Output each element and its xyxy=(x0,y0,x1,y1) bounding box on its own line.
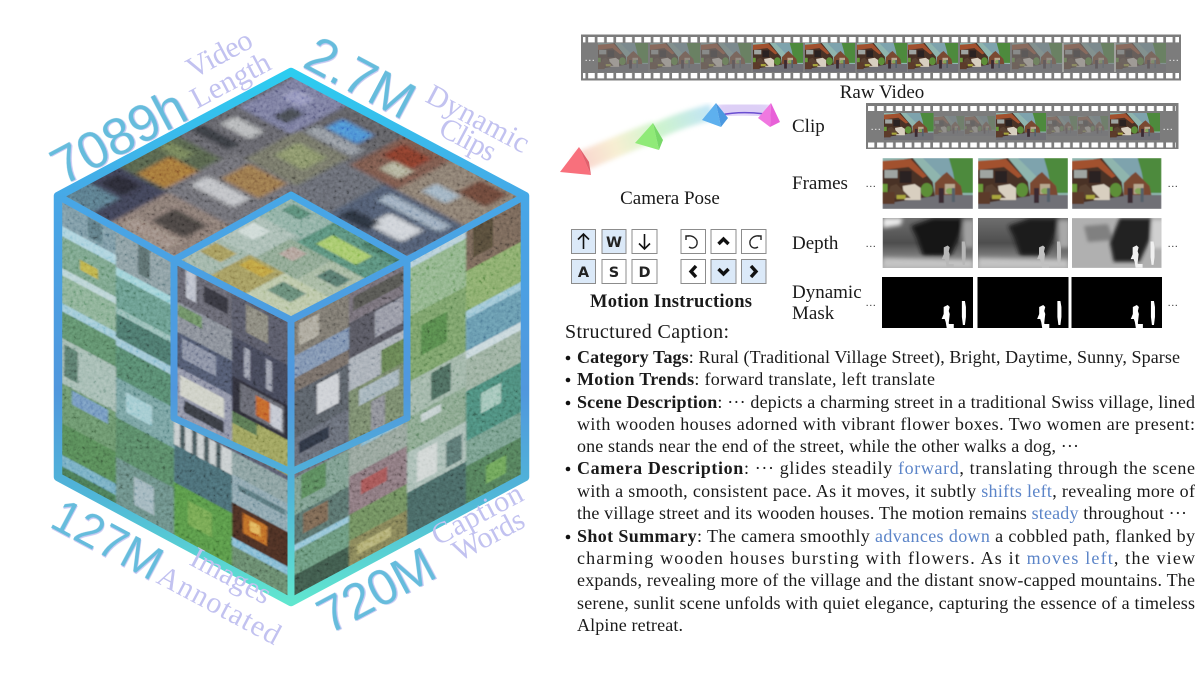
camera: green xyxy=(635,123,663,150)
small cube top face mosaic xyxy=(182,199,400,316)
row labels xyxy=(792,116,862,324)
bullet: shot summary: charming wooden houses bursting with flowers. As it moves left, the view xyxy=(577,548,1195,568)
dynamic mask row: ... xyxy=(1168,297,1178,309)
motion instruction keys: S xyxy=(609,265,619,281)
bullet: category tags: Category Tags: Rural (Traditional Village Street), Bright, Daytime, Sunny, Sparse xyxy=(577,347,1180,368)
depth row: ... xyxy=(1168,238,1178,250)
motion instruction keys: D xyxy=(638,265,651,281)
raw video filmstrip xyxy=(581,34,1181,80)
stat: 2.7M dynamic clips: 2.7M xyxy=(295,25,425,131)
stat: 720M caption words: 720M xyxy=(308,537,445,645)
stat: 7089h video length: 7089h xyxy=(41,77,196,197)
bullet: shot summary: Shot Summary: The camera smoothly advances down a cobbled path, flanked by xyxy=(577,526,1195,546)
raw video filmstrip: ... xyxy=(585,52,595,64)
dynamic mask row: ... xyxy=(866,297,876,309)
structured caption heading: Structured Caption: xyxy=(565,321,729,343)
bullet: motion trends: Motion Trends: forward translate, left translate xyxy=(577,369,935,389)
clip filmstrip: ... xyxy=(871,121,881,133)
stat: 720M caption words: Caption xyxy=(426,477,529,552)
camera: red xyxy=(560,147,591,175)
bullet: camera description: the village street and its wooden houses. The motion remains steady throughout ··· xyxy=(577,503,1187,523)
bullet: camera description: with a smooth, consistent pace. As it moves, it subtly shifts left, revealing more of xyxy=(577,481,1195,501)
bullet: camera description: Camera Description: ··· glides steadily forward, translating through the scene xyxy=(577,458,1195,478)
raw video label: Raw Video xyxy=(840,82,924,103)
motion instruction keys xyxy=(572,230,766,284)
small cube left face mosaic xyxy=(174,260,291,482)
bullet: scene description xyxy=(566,392,1195,456)
top face mosaic xyxy=(66,76,517,256)
camera: blue xyxy=(702,103,728,127)
camera pose trajectory xyxy=(560,103,780,175)
clip filmstrip: ... xyxy=(1163,121,1173,133)
motion instruction keys: A xyxy=(578,265,590,281)
row labels: Frames xyxy=(792,173,848,194)
right outer face mosaic xyxy=(291,195,525,610)
raw video filmstrip: ... xyxy=(1169,52,1179,64)
structured caption text xyxy=(566,347,1195,635)
stat: 7089h video length: Length xyxy=(185,46,276,115)
frames row xyxy=(866,158,1178,209)
bullet: scene description: one stands near the end of the street, while the other walks a dog, ··· xyxy=(577,436,1079,456)
dynamic mask row xyxy=(866,277,1178,328)
small cube right face mosaic xyxy=(291,259,407,480)
stat: 2.7M dynamic clips: Clips xyxy=(434,111,502,168)
stat: 127M images annotated xyxy=(43,488,286,652)
bullet: scene description: with wooden houses adorned with vibrant flower boxes. Two women are present: xyxy=(577,414,1195,434)
row labels: Dynamic xyxy=(792,282,862,303)
bullet: shot summary: serene, sunlit scene unfolds with quiet elegance, capturing the essence of a timeless xyxy=(577,593,1195,613)
left outer face mosaic xyxy=(58,196,291,611)
row labels: Depth xyxy=(792,233,839,254)
stat: 2.7M dynamic clips xyxy=(295,25,535,168)
stat: 2.7M dynamic clips: Dynamic xyxy=(421,78,535,160)
stat: 720M caption words: Words xyxy=(447,503,530,568)
clip filmstrip xyxy=(866,103,1178,149)
camera: magenta xyxy=(758,103,780,127)
motion instructions label: Motion Instructions xyxy=(590,292,752,312)
depth row xyxy=(866,218,1178,268)
stat: 7089h video length: Video xyxy=(181,23,258,85)
motion instruction keys: W xyxy=(606,235,622,251)
cube frame xyxy=(58,72,525,602)
row labels: Mask xyxy=(792,303,835,324)
bullet: shot summary: expands, revealing more of the village and the distant snow-capped mountains. The xyxy=(577,570,1195,590)
bullet: shot summary xyxy=(566,526,1195,635)
stat: 127M images annotated: 127M xyxy=(43,488,172,590)
stat: 127M images annotated: Images xyxy=(185,541,277,611)
frames row: ... xyxy=(1168,178,1178,190)
row labels: Clip xyxy=(792,116,825,137)
bullet: shot summary: Alpine retreat. xyxy=(577,615,683,635)
stat: 7089h video length xyxy=(41,23,276,197)
stat: 127M images annotated: Annotated xyxy=(152,559,286,652)
bullet: camera description xyxy=(566,458,1195,523)
stat: 720M caption words xyxy=(308,477,530,645)
bullet: scene description: Scene Description: ··· depicts a charming street in a traditional Swiss village, lined xyxy=(577,392,1195,412)
camera pose label: Camera Pose xyxy=(620,188,720,209)
depth row: ... xyxy=(866,238,876,250)
photo grain xyxy=(62,77,521,595)
cube: dataset mosaic xyxy=(50,60,535,611)
frames row: ... xyxy=(866,178,876,190)
